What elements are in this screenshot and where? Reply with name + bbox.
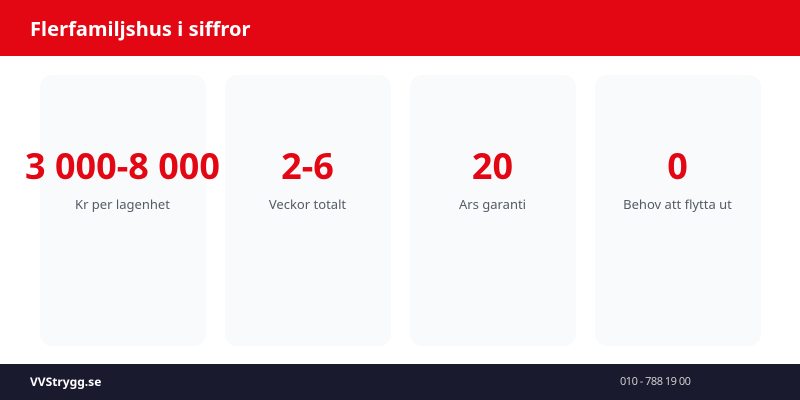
label: cost: Kr per lagenhet [75, 195, 170, 213]
stat: warranty: 20 [472, 141, 513, 190]
footer bar [0, 364, 800, 400]
panel: warranty years [410, 75, 576, 346]
panel: cost per apartment [40, 75, 206, 346]
footer phone: 010 - 788 19 00 [620, 374, 690, 389]
title: Flerfamiljshus i siffror [30, 15, 251, 42]
panel: total weeks [225, 75, 391, 346]
label: warranty: Ars garanti [459, 195, 526, 213]
label: weeks: Veckor totalt [269, 195, 346, 213]
stat: move out: 0 [667, 141, 688, 190]
header bar [0, 0, 800, 56]
stat: cost: 3 000-8 000 [25, 141, 220, 190]
footer brand: VVStrygg.se [30, 373, 101, 390]
label: move out: Behov att flytta ut [623, 195, 732, 213]
stat: weeks: 2-6 [281, 141, 334, 190]
panel: need to move out [595, 75, 761, 346]
